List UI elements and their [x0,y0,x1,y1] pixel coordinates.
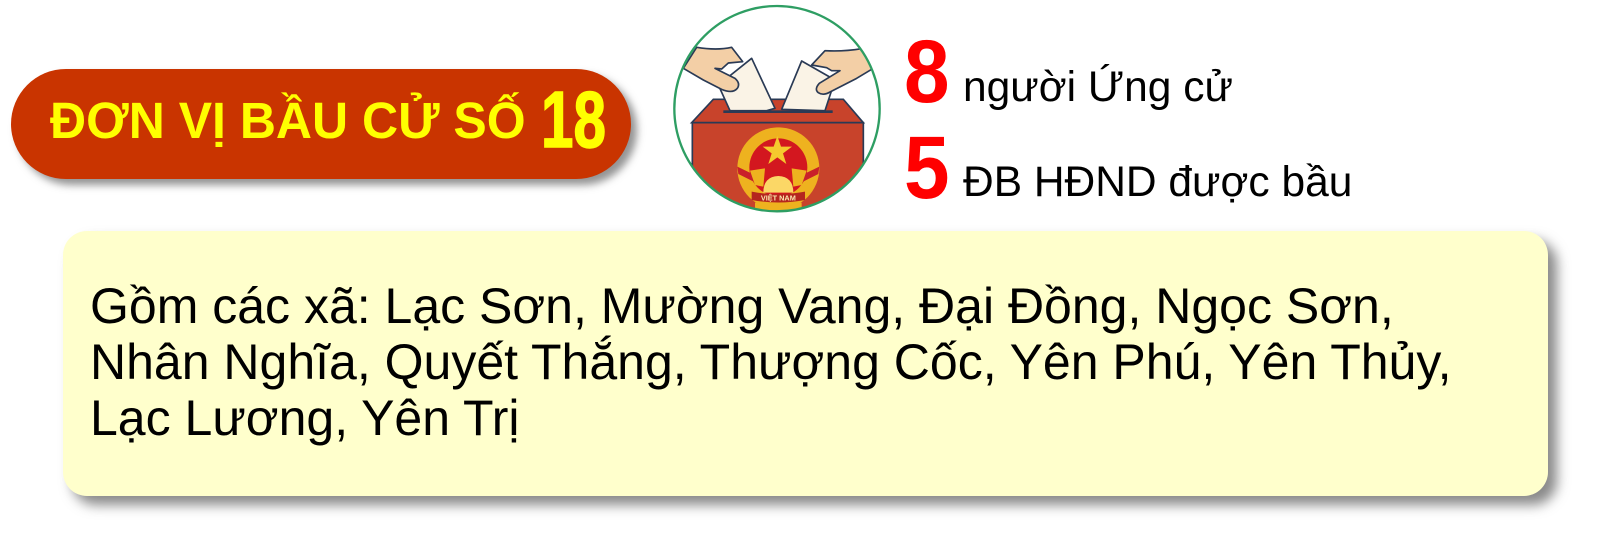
commune list text: Lạc Lương, Yên Trị [90,390,519,446]
national emblem [737,127,819,213]
right hand [812,49,873,94]
pill title text: ĐƠN VỊ BẦU CỬ SỐ [50,92,526,149]
pill number 18: 18 [541,75,606,164]
panel: list of communes [63,231,1548,496]
stat: candidates [904,21,1233,121]
header pill: constituency title [11,69,631,179]
number 5: 5 [904,117,950,217]
stat: elected delegates [904,117,1352,217]
label: candidates: người Ứng cử [963,64,1233,111]
number 8: 8 [904,21,950,121]
ballot box [692,99,863,223]
label: elected delegates: ĐB HĐND được bầu [963,159,1352,206]
commune list text: Nhân Nghĩa, Quyết Thắng, Thượng Cốc, Yên Phú, Yên Thủy, [90,334,1452,390]
icon: ballot box with hands in a circle [673,4,881,212]
left hand [683,47,743,91]
commune list text: Gồm các xã: Lạc Sơn, Mường Vang, Đại Đồng, Ngọc Sơn, [90,278,1394,334]
ballots [718,58,835,111]
commune list text [90,278,1452,446]
national emblem: VIỆT NAM [761,194,796,203]
